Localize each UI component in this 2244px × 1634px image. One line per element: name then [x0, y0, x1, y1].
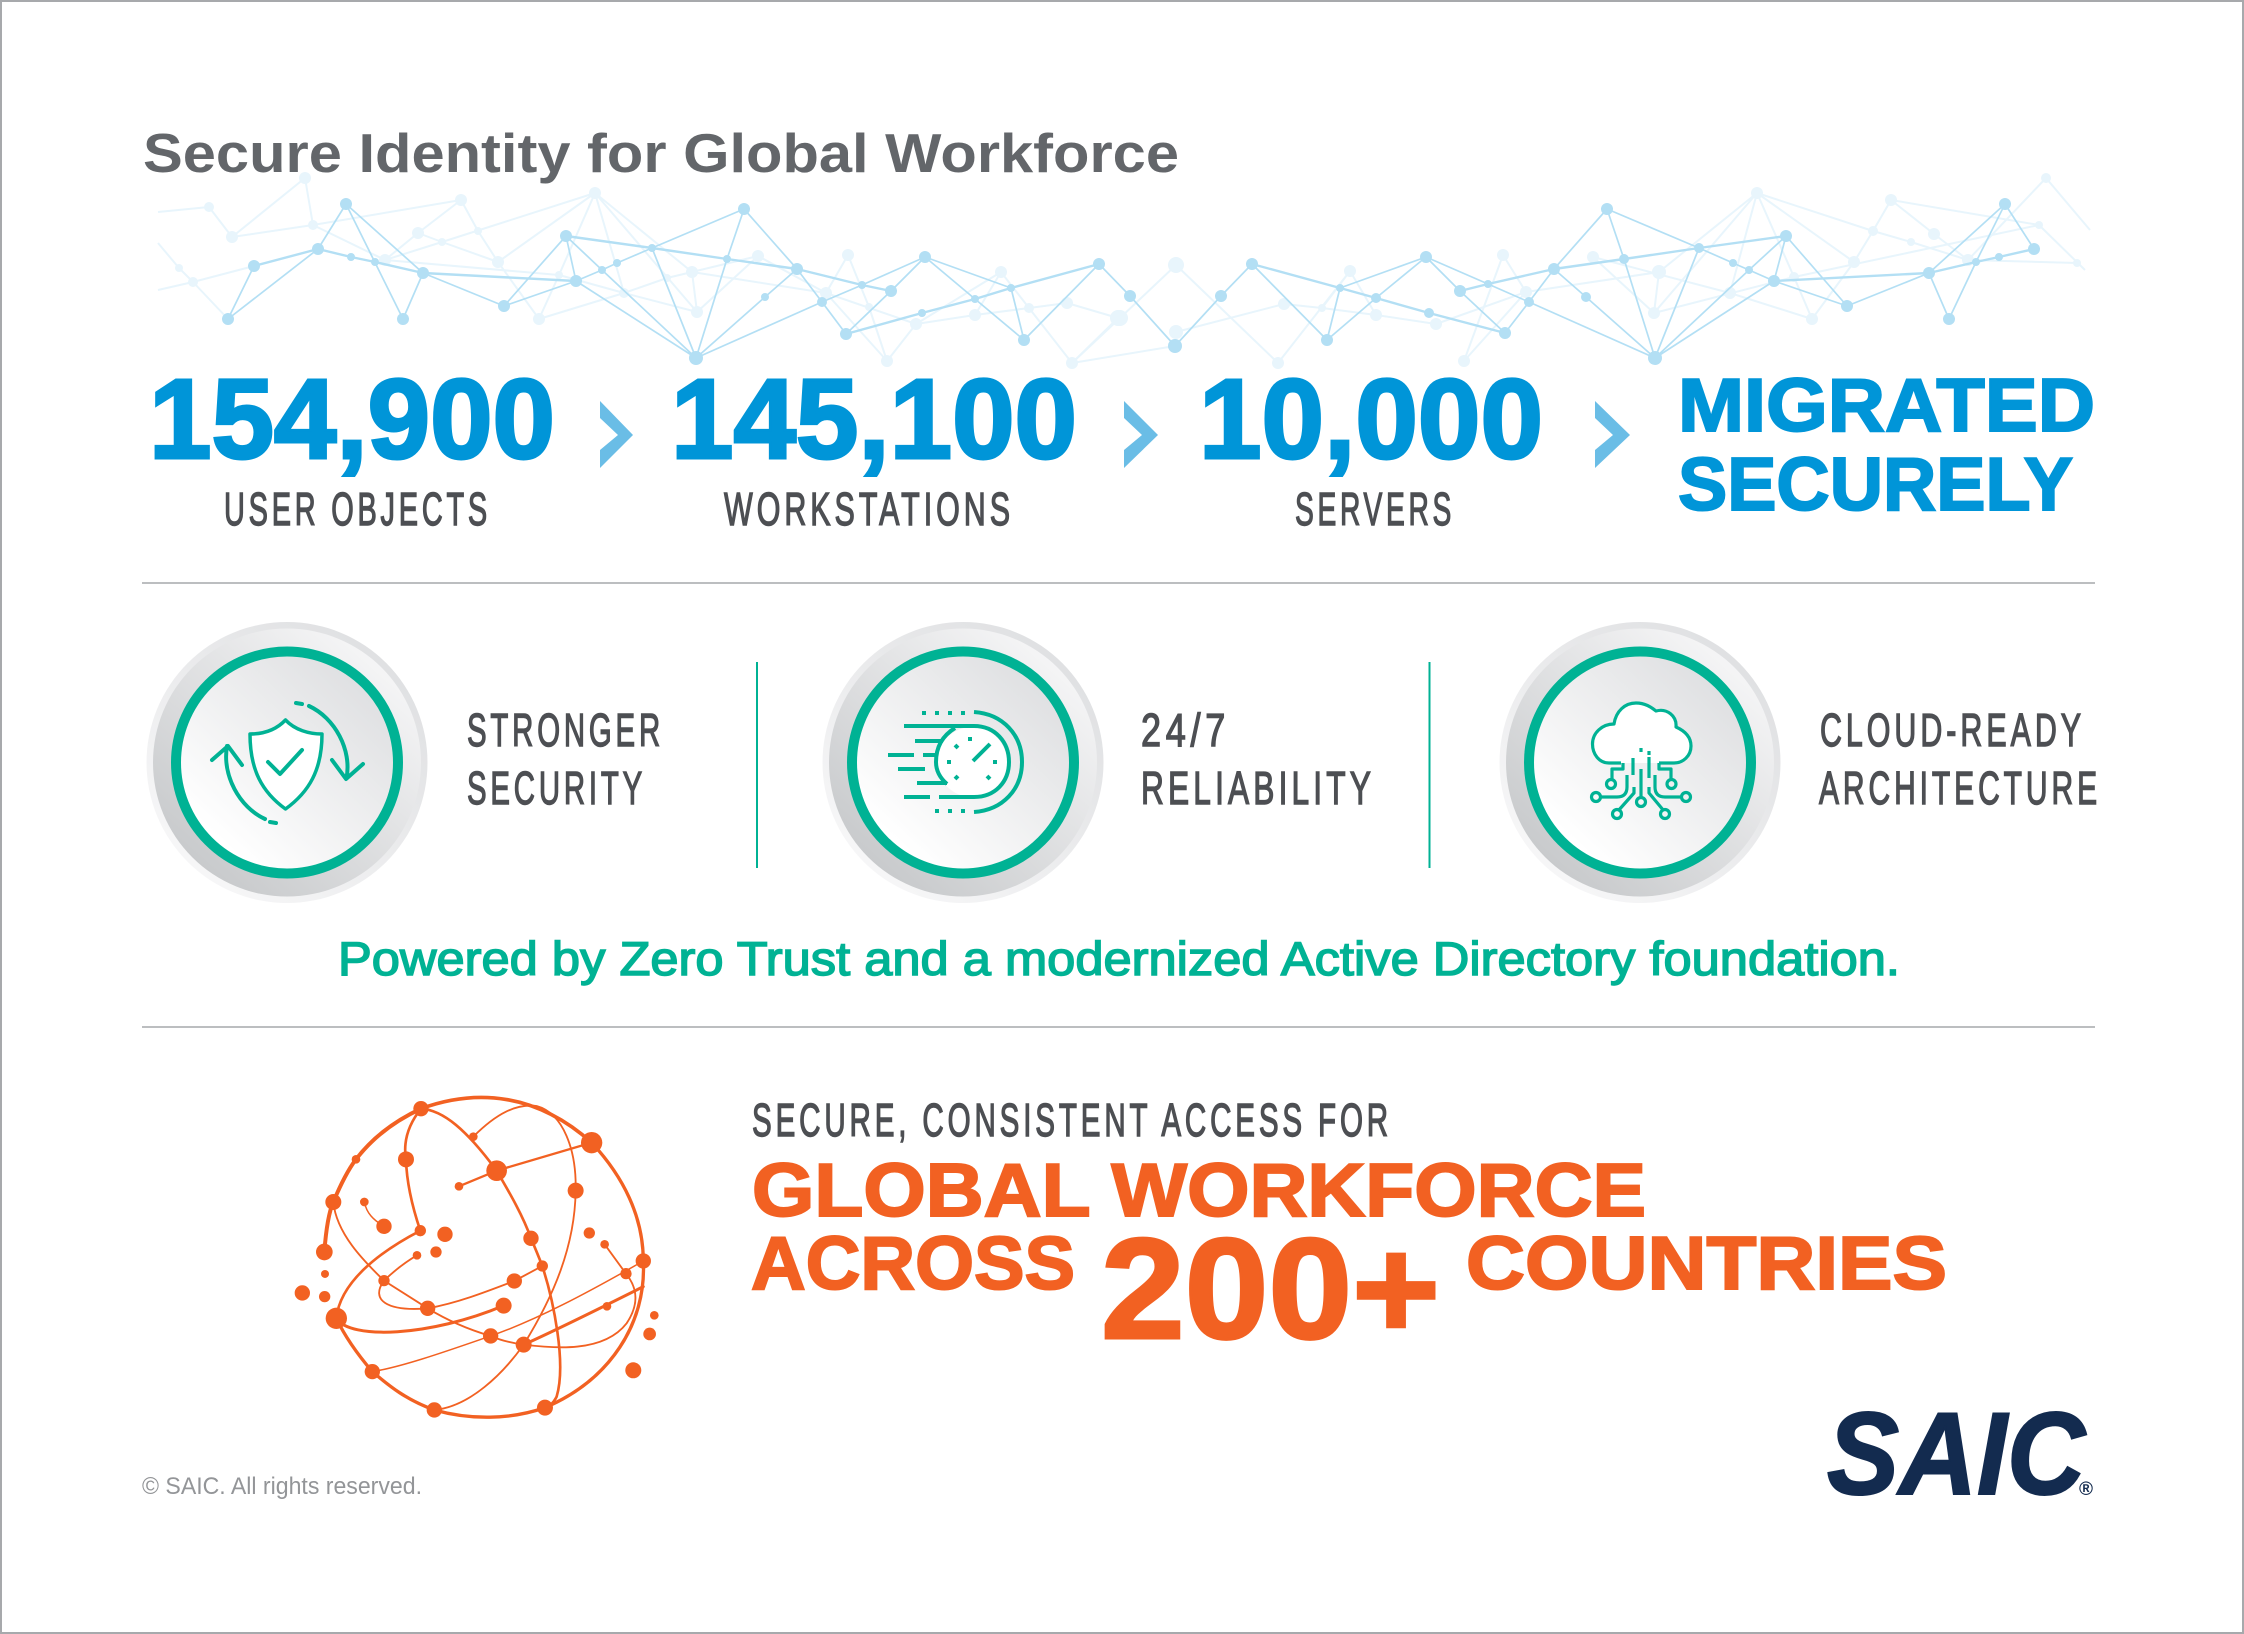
migrated securely: SECURELY [1678, 442, 2073, 526]
badge text: cloud-ready architecture: CLOUD-READY [1820, 704, 2085, 756]
copyright: © SAIC. All rights reserved. [142, 1473, 422, 1500]
badge text: stronger security: STRONGER [467, 704, 664, 756]
stat: 145,100 workstations: 145,100 [671, 356, 1077, 482]
badge: cloud-ready architecture [1500, 622, 1780, 903]
global workforce headline: ACROSS [751, 1221, 1075, 1305]
globe network icon [295, 1097, 659, 1418]
stat: 154,900 user objects: USER OBJECTS [224, 483, 491, 535]
global workforce headline: 200+ [1101, 1210, 1440, 1369]
icon: cloud circuit [1592, 703, 1691, 818]
global workforce headline [751, 1094, 1947, 1369]
badge text: cloud-ready architecture [1819, 704, 2101, 814]
stat: 145,100 workstations: WORKSTATIONS [724, 483, 1014, 535]
icon: speeding clock [888, 712, 1022, 812]
badge text: 24/7 reliability: 24/7 [1141, 704, 1230, 756]
stat: 10,000 servers: SERVERS [1295, 483, 1455, 535]
migrated securely [1678, 363, 2095, 526]
badge text: cloud-ready architecture: ARCHITECTURE [1819, 762, 2101, 814]
title: Secure Identity for Global Workforce [143, 122, 1179, 184]
badge: stronger security [146, 622, 428, 903]
global workforce headline: GLOBAL WORKFORCE [752, 1148, 1646, 1232]
arrow 1 [600, 401, 633, 468]
badge text: stronger security [467, 704, 664, 814]
badge: 24/7 reliability [822, 622, 1104, 903]
migrated securely: MIGRATED [1678, 363, 2095, 447]
stat: 154,900 user objects: 154,900 [149, 356, 555, 482]
tagline: Powered by Zero Trust and a modernized Active Directory foundation. [338, 932, 1900, 985]
stat: 10,000 servers: 10,000 [1199, 356, 1543, 482]
icon: shield with arrows [212, 703, 363, 823]
global workforce headline: COUNTRIES [1466, 1221, 1947, 1305]
arrow 2 [1124, 401, 1158, 468]
badge text: 24/7 reliability [1141, 704, 1375, 814]
SAIC logo: SAIC [1827, 1388, 2086, 1519]
network graphic [158, 172, 2090, 369]
badge text: 24/7 reliability: RELIABILITY [1141, 762, 1375, 814]
arrow 3 [1595, 401, 1630, 468]
badge text: stronger security: SECURITY [467, 762, 646, 814]
SAIC logo: ® [2079, 1479, 2093, 1500]
global workforce headline: SECURE, CONSISTENT ACCESS FOR [752, 1094, 1392, 1146]
